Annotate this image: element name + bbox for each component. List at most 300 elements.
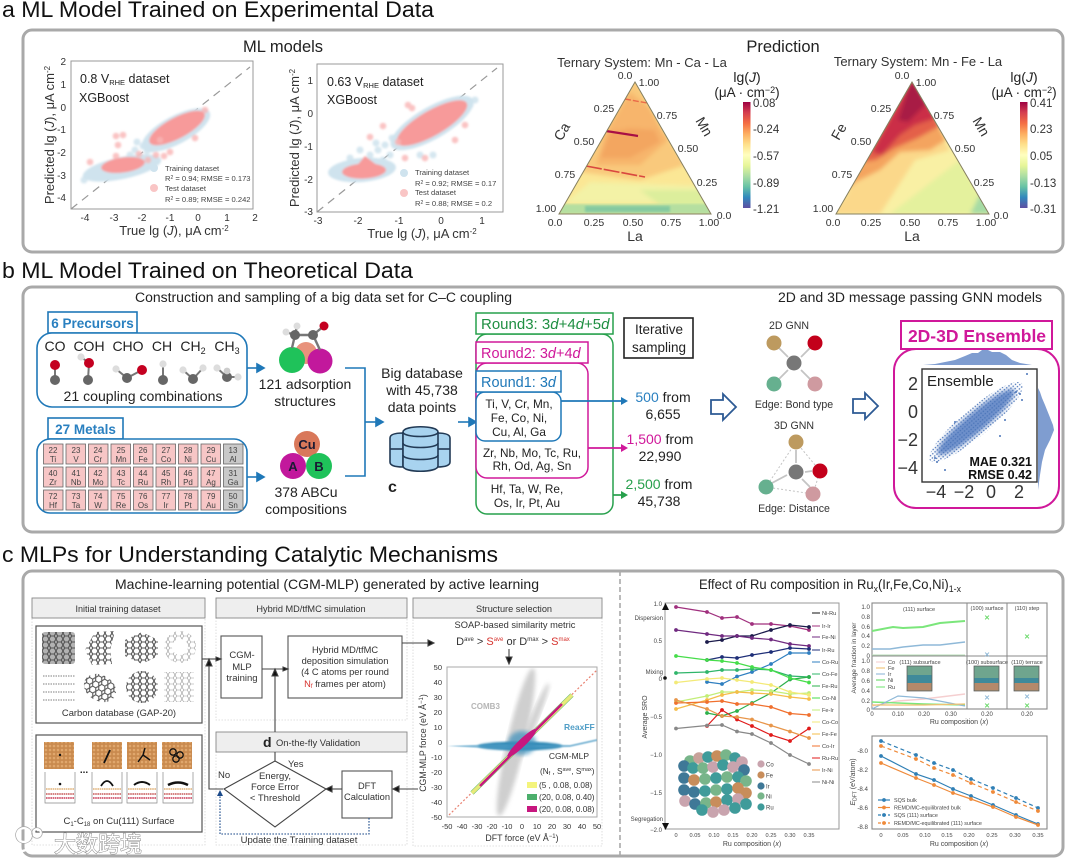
metals box: Cr [94,455,103,464]
SRO legend: Ir-Ni [822,768,833,774]
2D-3D ensemble panel: Ensemble [927,373,994,390]
energy chart legend and axes [850,748,1044,848]
sample counts: 1,500 from [627,431,693,447]
header: on-the-fly validation: d [263,734,272,750]
parity chart labels: DFT force (eV Å [485,833,549,843]
SRO axis labels: −1.5 [650,791,663,797]
metals box: Al [229,455,237,464]
SRO axis labels: 0.30 [785,833,795,839]
round 1 box: Fe, Co, Ni, [491,411,547,425]
box: hybrid deposition simulation: N [304,679,313,690]
metals box: 72 [49,492,58,501]
scatter 1 axes labels: -2 [138,213,147,224]
layer fraction labels: (111) surface [903,607,935,613]
scatter 2 axes labels: -2 [470,227,477,236]
parity chart labels: -40 [431,798,442,807]
2D-3D ensemble panel: 0 [986,482,996,502]
header: on-the-fly validation: On-the-fly Validation [276,737,360,748]
round 3 box: Round3: 3d+4d+5d [481,316,610,333]
scatter 1 axes labels: -1 [166,213,175,224]
Cu surface box: 18 [84,822,91,828]
metals box: 28 [184,446,193,455]
SRO axis labels: 1.0 [654,602,663,608]
layer fraction labels: 0.20 [1021,712,1033,718]
scatter 1 axes labels: -2 [222,224,229,233]
ternary chart: Mn-Fe-La: Ternary System: Mn - Fe - La [834,54,1003,69]
heading b: b ML Model Trained on Theoretical Data [2,258,414,283]
force parity scatter [447,666,597,818]
layer fraction chart [872,603,1047,710]
SRO axis labels: Dispersion [635,616,663,622]
box: CGM-MLP training [221,636,262,698]
ternary 2 tick labels: 1.00 [976,217,996,229]
layer fraction labels: Average fraction in layer [851,622,858,693]
text: SOAP metric: D [456,636,464,648]
parity chart labels: (20, 0.08, 0.08) [539,805,595,814]
parity chart labels: ReaxFF [564,722,595,732]
metals box: 13 [229,446,238,455]
energy chart legend and axes: -8.4 [857,786,869,793]
parity chart labels: , S [550,767,563,776]
scatter 1 axes labels: -2 [43,65,52,73]
precursors box: 6 Precursors [51,316,134,331]
round 1 box: Ti, V, Cr, Mn, [485,397,553,411]
colorbar 1 [714,69,780,216]
ternary 2 tick labels: 0.0 [994,210,1008,222]
ensemble scatter [921,369,1037,482]
parity chart labels: -50 [442,822,452,831]
parity chart labels: COMB3 [471,702,500,711]
metals box: 73 [72,492,81,501]
metals box: 23 [72,446,81,455]
metals box: Sn [228,501,238,510]
scatter 2 axes labels: 0 [438,216,444,227]
round 2 box: Round2: 3d+4d [481,346,582,362]
text: SOAP metric: or D [503,636,527,648]
precursors box: 3 [235,346,240,356]
text: SOAP metric: S [486,636,504,648]
metals box: Au [206,501,216,510]
scatter 2 annotation: dataset [379,75,424,89]
sample counts: 6,655 [645,406,681,422]
scatter 2 axes labels: -3 [314,216,323,227]
parity chart labels: 20 [434,708,442,717]
layer fraction labels: 1.0 [861,604,871,611]
scatter 2 legend: = 0.88; RMSE = 0.2 [423,199,492,208]
energy chart legend and axes: SQS bulk [894,798,917,804]
SRO legend: Fe-Ir [822,708,834,714]
SRO legend: Ir-Ru [822,648,834,654]
text: ABCu compositions [265,484,347,517]
precursors box: COH [73,338,105,354]
icon: ABCu composition [280,431,332,479]
precursors box: CH [152,338,172,354]
metals box: Mo [92,478,104,487]
scatter 2 axes labels: -2 [288,68,297,76]
SRO axis labels: 0.10 [709,833,719,839]
scatter 1 axes labels: -4 [57,193,66,204]
scatter 2 axes labels: True lg (J), μA cm [367,226,470,241]
scatter 2 annotation: XGBoost [327,93,378,107]
energy chart legend and axes: 0.10 [919,833,931,839]
layer fraction labels: 0.6 [861,624,871,631]
scatter 2 axes labels: 1 [479,216,485,227]
SRO legend: Fe-Fe [822,732,837,738]
parity chart labels: (20, 0.08, 0.40) [539,793,595,802]
scatter 1 axes labels: 1 [224,213,230,224]
box: DFT calculation: DFT [358,781,376,791]
colorbar 1: -0.89 [753,178,779,190]
layer fraction labels: 1.0 [861,658,871,665]
energy chart legend and axes: 0.05 [897,833,909,839]
text: big database: data points [388,399,456,415]
ternary 1 tick labels: 0.25 [594,103,614,115]
SRO axis labels: Ru composition (x) [723,841,781,848]
parity chart labels: , S [571,767,582,776]
scatter 1 axes labels: Predicted lg (J), μA cm [42,73,57,204]
energy chart legend and axes: 0.15 [941,833,953,839]
metals box: Hf [49,501,58,510]
layer fraction labels: 0.2 [861,698,871,705]
scatter 2 axes labels: 1 [307,76,313,87]
metals box: Ag [206,478,216,487]
workflow labels: Yes [288,759,304,770]
metals box: 74 [94,492,103,501]
layer fraction labels: 0 [867,707,871,714]
scatter 1 axes labels: 0 [60,103,66,114]
ternary 1 tick labels: 0.50 [623,217,643,229]
scatter chart: 0.8 V dataset [71,61,253,209]
parity chart labels: 50 [434,663,442,672]
energy chart legend and axes: -8.2 [857,767,869,774]
energy chart legend and axes: E [850,801,857,806]
header: initial training dataset [32,598,205,618]
workflow labels: No [218,770,230,781]
iterative sampling box: Iterative [635,322,683,337]
energy chart legend and axes: 0.20 [963,833,975,839]
SRO legend: Co-Fe [822,672,838,678]
layer fraction chart: ✕ [984,703,990,710]
metals box: Fe [138,455,148,464]
sample counts: 45,738 [638,493,681,509]
scatter 1 axes labels: -3 [57,171,66,182]
ternary 2 tick labels: 0.50 [955,143,975,155]
box: hybrid deposition simulation: frames per atom) [313,679,386,689]
parity chart labels: 10 [533,822,541,831]
box: CGM-MLP training: CGM- [229,650,255,661]
layer fraction labels: 0.4 [861,633,871,640]
cube legend: Co [766,762,774,768]
decision diamond: < Threshold [250,793,300,804]
2D GNN diagram: Edge: Bond type [755,399,833,411]
sample counts: 500 from [635,389,691,405]
2D-3D ensemble panel: 0 [908,402,918,422]
decision diamond [224,761,326,827]
box: hybrid deposition simulation: f [311,684,313,690]
SRO legend: Ir-Ir [822,624,831,630]
text: SOAP metric: max [527,637,539,643]
ternary 1 tick labels: 0.0 [618,70,632,82]
ternary chart: Mn-Fe-La [830,54,1003,220]
parity chart labels: −1 [549,834,556,840]
colorbar 2: -0.13 [1030,178,1056,190]
SRO axis labels: 0.35 [804,833,814,839]
metals box: 41 [72,469,81,478]
metals box: 46 [184,469,193,478]
heading: ML models: ML models [243,38,323,56]
icon: adsorption structure [279,322,332,374]
2D-3D ensemble panel: −2 [954,482,974,502]
metals box: 27 [162,446,171,455]
scatter 1 legend: 2 [170,175,173,181]
metals box: Tc [117,478,125,487]
decision diamond: Force Error [251,782,299,793]
layer fraction labels: 0.20 [981,712,993,718]
scatter 2 legend: = 0.92; RMSE = 0.17 [423,179,496,188]
metals box: 42 [94,469,103,478]
colorbar 2: ) [1052,85,1057,100]
metals box [37,418,247,513]
scatter 2 axes labels [287,68,485,241]
icon: alloy cube [678,749,752,818]
energy chart legend and axes: 0.35 [1032,833,1044,839]
text: SOAP metric: SOAP-based similarity metric [455,620,576,630]
parity chart labels: -20 [431,768,442,777]
precursors box: CH [180,338,201,354]
scatter 1 axes labels [42,57,258,238]
colorbar 1: -0.57 [753,151,779,163]
colorbar 2: -0.31 [1030,204,1056,216]
layer fraction chart: ✕ [1024,634,1030,641]
ternary 2 tick labels: 1.00 [916,77,936,89]
header: structure selection [413,598,602,618]
scatter 1 legend: R [165,174,170,183]
metals box: 75 [117,492,126,501]
header: hybrid simulation: Hybrid MD/tfMC simulation [256,604,366,614]
colorbar 2: −2 [1042,85,1052,95]
layer fraction labels: 0.20 [918,712,930,718]
parity chart labels [418,663,601,843]
scatter 1 legend: Training dataset [165,164,220,173]
layer fraction labels: 0.8 [861,668,871,675]
round 3 box: Os, Ir, Pt, Au [494,496,560,510]
carbon structures [42,631,196,708]
Cu slab structures [44,742,193,803]
layer fraction labels: 0.6 [861,678,871,685]
parity chart labels: ) [592,767,595,776]
layer fraction labels: Co [888,660,895,666]
2D-3D ensemble panel: −4 [926,482,946,502]
scatter 1 axes labels: -4 [81,213,90,224]
energy chart legend and axes: (eV/atom) [850,758,857,791]
ternary 1 tick labels: 0.25 [697,177,717,189]
scatter 1 legend: R [165,195,170,204]
metals box: 45 [162,469,171,478]
metals box: Zr [49,478,57,487]
cube legend: Ir [766,784,770,790]
precursors box: 21 coupling combinations [64,388,222,404]
metals box: 77 [162,492,171,501]
SRO legend: Co-Co [822,720,838,726]
SRO axis labels: Segregation [631,817,663,823]
layer fraction labels: 0.2 [861,643,871,650]
ternary 2 tick labels: La [904,228,920,244]
metals box: Mn [115,455,127,464]
ternary 2 tick labels: 0.0 [826,217,840,229]
layer fraction labels: 0 [870,712,874,718]
ternary 1 tick labels: 0.0 [548,217,562,229]
parity chart labels: ) [556,833,559,843]
box: DFT calculation: Calculation [344,792,390,802]
heading c: c MLPs for Understanding Catalytic Mechanisms [2,542,498,567]
text: ABCu compositions: 378 ABCu [274,484,338,500]
colorbar 1: 0.08 [753,98,775,110]
ternary 2 tick labels: Mn [970,114,993,139]
scatter 1 axes labels: 1 [60,80,66,91]
metals box: Ti [50,455,56,464]
scatter 1 annotation: 0.8 V [80,72,109,86]
scatter 2 annotation: 0.63 V [327,75,363,89]
scatter 1 legend: = 0.94; RMSE = 0.173 [173,174,251,183]
box: CGM-MLP training: MLP [232,662,252,673]
parity chart labels: -10 [431,753,442,762]
metals box: Nb [71,478,82,487]
energy chart legend and axes: -8.8 [857,824,869,831]
hollow arrow 1 [711,394,736,420]
box: hybrid deposition simulation: deposition simulation [302,656,388,666]
scatter 2 annotation: RHE [363,81,379,90]
ternary 2 tick labels: 1.00 [813,203,833,215]
scatter 2 legend [400,168,496,208]
icon: database [390,427,450,471]
text: SOAP metric: > [539,636,551,648]
box: DFT calculation [342,771,392,818]
SRO legend: Ni-Ni [822,780,834,786]
periodic table cells [44,444,243,510]
parity chart labels: -20 [487,822,497,831]
Cu surface box [36,735,202,832]
scatter 2 axes labels: -2 [354,216,363,227]
ternary 1 tick labels: 1.00 [699,217,719,229]
scatter 1 annotation: RHE [109,78,125,87]
text: SOAP metric: ave [464,637,474,643]
icon: ABCu composition: A [288,459,298,474]
energy chart legend and axes: 0.30 [1009,833,1021,839]
energy chart legend and axes: SQS (111) surface [894,813,938,819]
cube legend [757,760,774,812]
subheading: Ru composition: (Ir,Fe,Co,Ni) [878,576,949,592]
energy chart legend and axes: Ru composition (x) [930,841,988,848]
workflow column containers [32,618,602,846]
scatter 1 legend [150,164,251,204]
subheading: Ru composition: x [874,584,878,595]
precursors box: CO [44,338,66,354]
ternary 2 tick labels: 0.75 [938,217,958,229]
heading: Prediction: Prediction [746,38,820,56]
subheading: CGM-MLP: Machine-learning potential (CGM-MLP) generated by active learning [115,576,539,592]
ternary chart: Mn-Ca-La [555,55,728,220]
round 3 box: Hf, Ta, W, Re, [491,482,563,496]
Cu surface box: -C [74,816,84,827]
energy chart legend and axes: -8.0 [857,748,869,755]
ternary 2 tick labels: 0.75 [832,169,852,181]
header: on-the-fly validation [216,732,407,752]
ternary chart: Mn-Ca-La: Ternary System: Mn - Ca - La [557,55,728,70]
iterative sampling box [624,318,693,358]
layer fraction labels: (100) subsurface [966,660,1008,666]
layer fraction chart: ✕ [984,695,990,702]
metals box: 26 [139,446,148,455]
SRO axis labels: 0.20 [747,833,757,839]
layer fraction labels [851,604,1043,726]
metals box: 31 [229,469,238,478]
round 2 box: Zr, Nb, Mo, Tc, Ru, [483,446,581,460]
box: CGM-MLP training: training [226,673,258,684]
parity chart labels: -30 [431,783,442,792]
metals box: Ru [138,478,148,487]
metals box: W [94,501,102,510]
sample counts: 2,500 from [626,476,692,492]
scatter 2 legend: Training dataset [415,168,470,177]
precursors box: 2 [201,346,206,356]
carbon database box [36,626,202,723]
layer fraction chart: ✕ [1024,703,1030,710]
scatter chart: 0.63 V dataset [317,64,503,212]
ternary 1 tick labels [536,70,731,244]
ternary 2 tick labels: 0.50 [851,136,871,148]
metals box: Ir [164,501,169,510]
ternary 2 tick labels: 0.75 [934,110,954,122]
scatter 2 legend: 2 [420,200,423,206]
parity chart labels: -30 [472,822,482,831]
2D-3D ensemble panel [894,321,1059,508]
scatter 1 axes labels: 2 [252,213,258,224]
parity chart labels: 0 [520,822,524,831]
ternary 2 tick labels: 0.50 [900,217,920,229]
SRO axis labels: Average SRO [642,695,649,739]
layer fraction labels: 0.8 [861,614,871,621]
scatter 2 axes labels: -1 [304,142,313,153]
round 2 box [476,342,588,478]
arrows: inputs to database [247,364,476,481]
hollow arrow 2 [853,393,878,419]
scatter 2 legend: R [415,199,420,208]
scatter 1 annotation: dataset [125,72,170,86]
Cu surface box: 1 [70,822,74,828]
layer fraction labels: Fe [888,666,895,672]
SRO axis labels: −0.5 [650,715,663,721]
ternary 2 tick labels: 0.25 [861,217,881,229]
energy chart legend and axes: REMD/MC-equilibrated (111) surface [894,821,982,827]
SRO axis labels: −2.0 [650,828,663,834]
text: SOAP metric: ave [494,637,504,643]
metals box: Pd [183,478,193,487]
ternary 1 tick labels: 0.75 [555,169,575,181]
colorbar 1: -1.21 [753,204,779,216]
subheading: GNN models: 2D and 3D message passing GNN models [778,290,1042,305]
round 1 box: Cu, Al, Ga [492,425,546,439]
cube legend: Ni [766,794,772,800]
ternary 1 tick labels: Ca [550,120,573,143]
SRO axis labels: 0.5 [654,639,663,645]
metals box: 40 [49,469,58,478]
energy chart legend and axes: REMD/MC-equilibrated bulk [894,806,961,812]
Cu surface box: on Cu(111) Surface [90,816,175,827]
parity chart labels: 20 [548,822,556,831]
sample counts [626,389,693,509]
layer fraction labels: 0 [867,653,871,660]
SRO legend: Ru-Ru [822,756,838,762]
